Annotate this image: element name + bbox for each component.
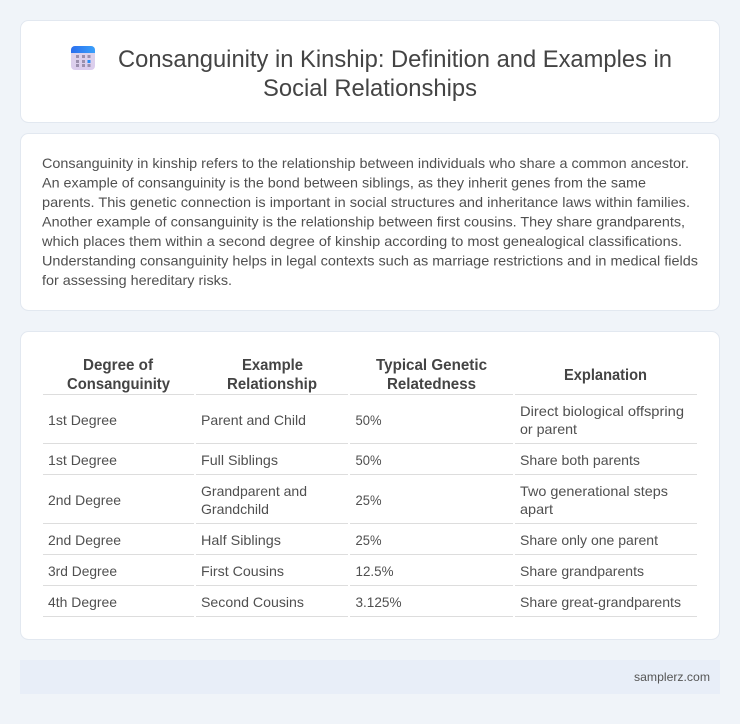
table row: first cousins: 12.5% [356, 563, 394, 579]
title: Social Relationships [263, 75, 477, 102]
text block: definition: for assessing hereditary risks. [42, 272, 232, 288]
text block: definition: Another example of consanguinity is the relationship between first cousins. They share grandparents, [42, 214, 685, 230]
table row: second cousins: 3.125% [356, 594, 402, 610]
panel: consanguinity table [20, 332, 720, 640]
table row: full siblings: Full Siblings [201, 452, 278, 468]
table row: parent and child: Parent and Child [201, 412, 306, 428]
table header row: Example [242, 357, 303, 374]
table row: parent and child [43, 403, 697, 444]
text block: definition: Understanding consanguinity helps in legal contexts such as marriage restrictions and in medical fields [42, 252, 698, 268]
table row: half siblings: 2nd Degree [48, 532, 121, 548]
table row: grandparent and grandchild [43, 483, 697, 524]
table header row: Explanation [564, 367, 647, 384]
text block: definition: parents. This genetic connection is important in social structures and inheritance laws within families. [42, 194, 690, 210]
table row: full siblings: 50% [356, 452, 382, 468]
table row: second cousins: Second Cousins [201, 594, 304, 610]
table row: full siblings: Share both parents [520, 452, 640, 468]
table row: first cousins: Share grandparents [520, 563, 644, 579]
panel: definition paragraph [20, 134, 720, 310]
text block: definition: which places them within a second degree of kinship according to most genealogical classifications. [41, 233, 682, 249]
title: Consanguinity in Kinship: Definition and Examples in [118, 46, 672, 73]
table row: half siblings [43, 532, 697, 555]
table row: grandparent and grandchild: Grandparent and [201, 483, 307, 499]
table row: first cousins: 3rd Degree [48, 563, 117, 579]
table row: half siblings: Share only one parent [520, 532, 658, 548]
footer bar [20, 660, 720, 694]
table row: grandparent and grandchild: apart [520, 501, 553, 517]
table row: half siblings: 25% [356, 532, 382, 548]
table row: grandparent and grandchild: 2nd Degree [48, 492, 121, 508]
table row: grandparent and grandchild: 25% [356, 492, 382, 508]
table row: grandparent and grandchild: Grandchild [201, 501, 269, 517]
icon: calendar [71, 46, 95, 70]
table header row: Relationship [227, 376, 317, 393]
table row: second cousins: 4th Degree [48, 594, 117, 610]
text block: definition: Consanguinity in kinship refers to the relationship between individuals who share a common ancestor. [42, 155, 689, 171]
footer bar: samplerz.com [634, 670, 710, 684]
table header row: Typical Genetic [376, 357, 487, 374]
table row: parent and child: Direct biological offspring [520, 403, 684, 419]
text block: definition [41, 155, 698, 288]
panel: header [20, 20, 720, 122]
table row: half siblings: Half Siblings [201, 532, 281, 548]
table row: second cousins [43, 594, 697, 617]
table header row: Degree of [83, 357, 154, 374]
title [118, 46, 672, 102]
table header row: Relatedness [387, 376, 476, 393]
table row: parent and child: or parent [520, 421, 577, 437]
text block: definition: An example of consanguinity is the bond between siblings, as they inherit genes from the same [42, 174, 646, 190]
table row: first cousins [43, 563, 697, 586]
table row: grandparent and grandchild: Two generational steps [520, 483, 668, 499]
table row: full siblings: 1st Degree [48, 452, 117, 468]
table header row [43, 357, 697, 395]
table row: full siblings [43, 452, 697, 475]
table header row: Consanguinity [67, 376, 170, 393]
table row: second cousins: Share great-grandparents [520, 594, 681, 610]
table row: parent and child: 50% [356, 412, 382, 428]
table row: first cousins: First Cousins [201, 563, 284, 579]
table row: parent and child: 1st Degree [48, 412, 117, 428]
